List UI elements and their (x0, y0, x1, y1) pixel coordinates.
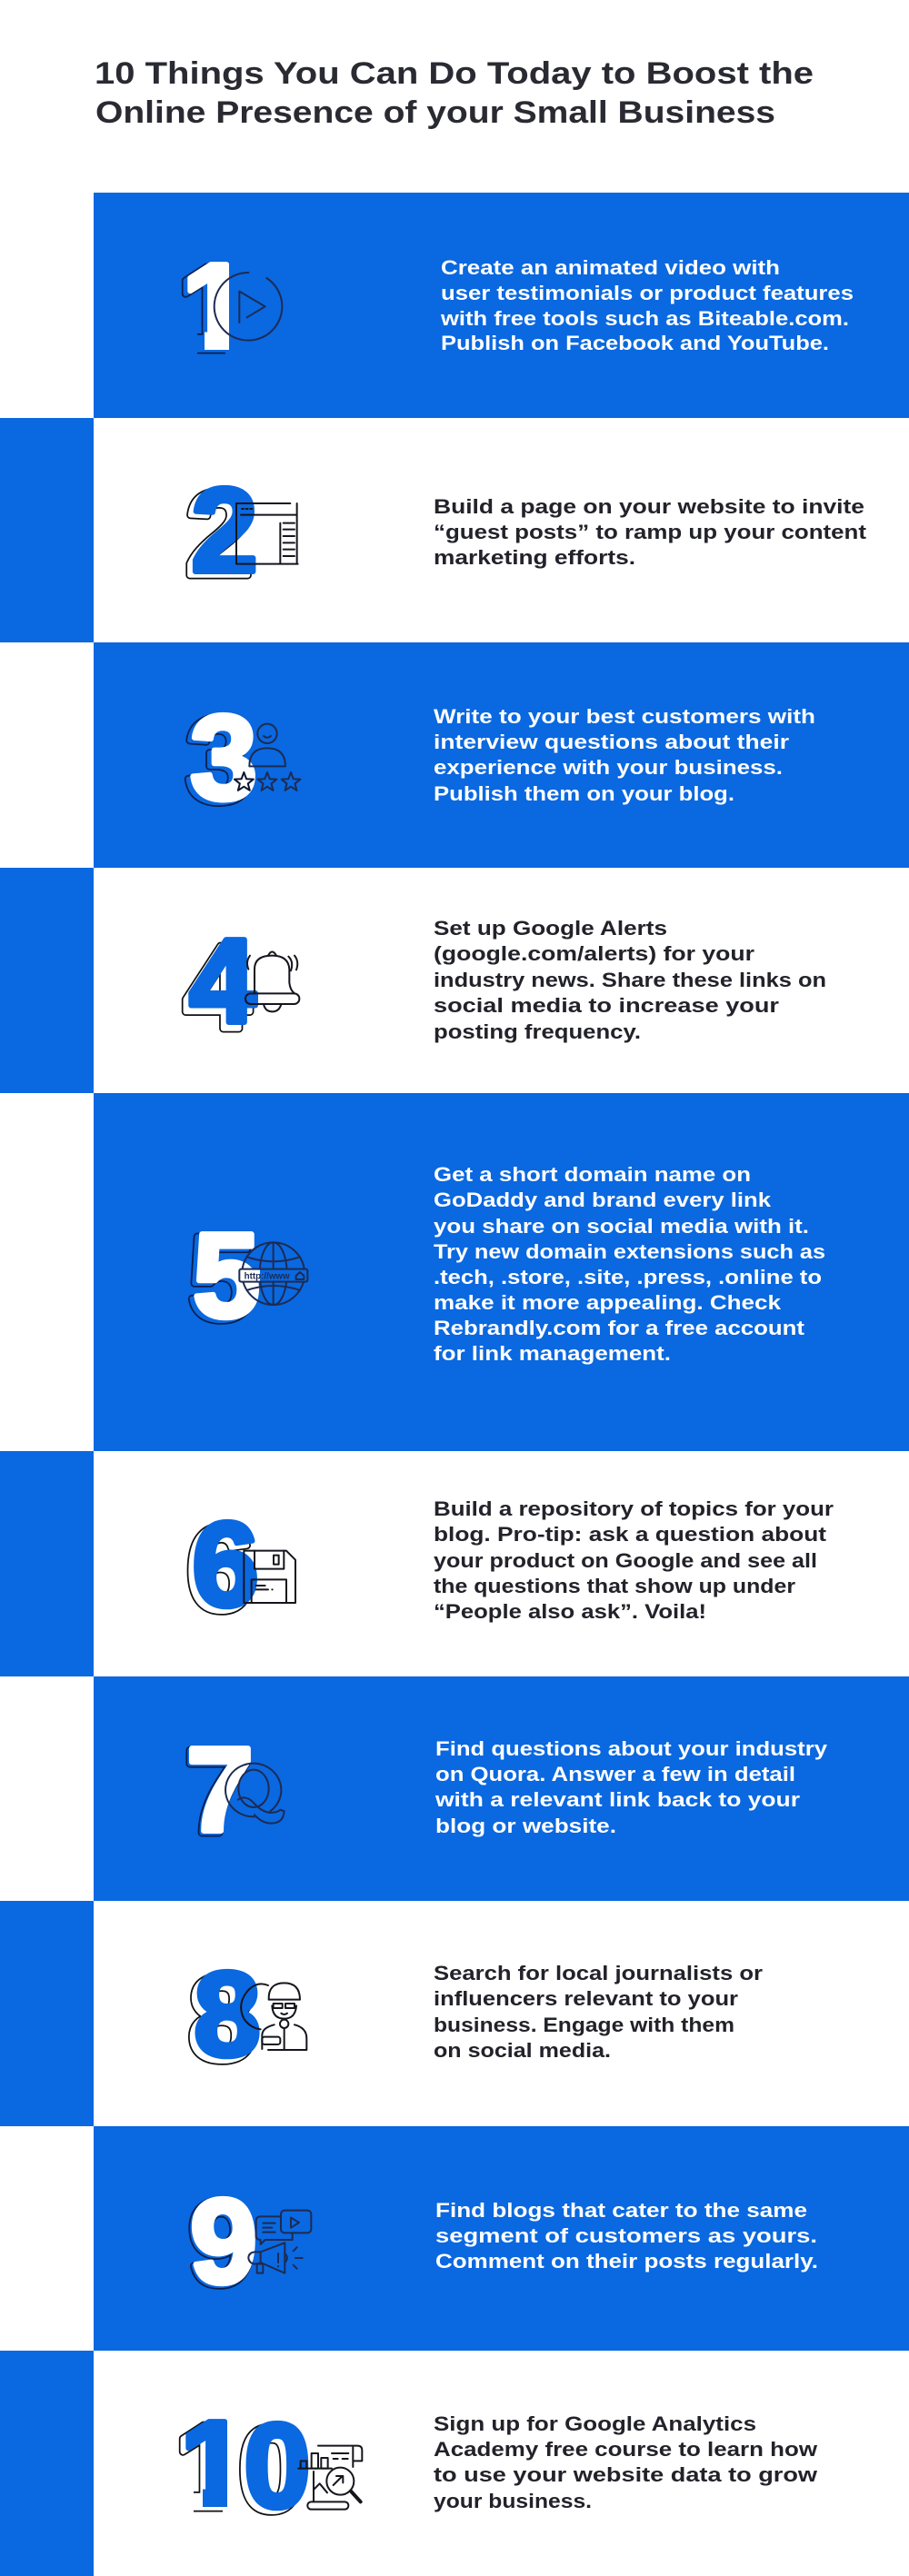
number 8: 8 (188, 1952, 255, 2085)
number 4: 4 (189, 914, 256, 1048)
text block 3: interview questions about their (434, 731, 789, 753)
text block 4: social media to increase your (434, 994, 779, 1017)
text block 4 (434, 917, 826, 1043)
blue side block 10 (0, 2351, 94, 2576)
text block 4: industry news. Share these links on (434, 969, 826, 991)
panel: step 1 (94, 193, 909, 418)
text block 6: the questions that show up under (434, 1575, 795, 1597)
number 10: 0 (238, 2402, 305, 2536)
text block 8: on social media. (434, 2039, 611, 2062)
number 5: 5 (188, 1211, 255, 1345)
text block 6: “People also ask”. Voila! (434, 1600, 706, 1623)
text block 4: posting frequency. (434, 1020, 641, 1043)
title (95, 56, 814, 130)
number 3: 3 (185, 693, 253, 827)
icon: journalist (241, 1983, 306, 2050)
number 8: 8 (188, 1952, 255, 2085)
number 8: 8 (194, 1947, 261, 2081)
number 10: 1 (180, 2396, 247, 2530)
number 3: 3 (185, 693, 253, 827)
number 10: 1 (175, 2400, 242, 2533)
text block 1: Create an animated video with (441, 256, 780, 279)
title: 10 Things You Can Do Today to Boost the (95, 56, 814, 91)
text block 9: Comment on their posts regularly. (435, 2250, 818, 2273)
number 7: 7 (185, 1725, 252, 1858)
text block 6: your product on Google and see all (434, 1549, 817, 1572)
number 10 (178, 2419, 309, 2516)
text block 3 (434, 705, 815, 805)
number 10: 0 (244, 2399, 311, 2532)
blue side block 4 (0, 868, 94, 1093)
text block 7: Find questions about your industry (435, 1737, 828, 1760)
number 3: 3 (190, 691, 257, 824)
panel: step 7 (94, 1676, 909, 1901)
blue band 9 (94, 2126, 909, 2351)
text block 5: for link management. (434, 1342, 671, 1365)
text block 2: “guest posts” to ramp up your content (434, 521, 867, 543)
number 7: 7 (185, 1725, 252, 1858)
text block 4: Set up Google Alerts (434, 917, 667, 940)
number 2: 2 (185, 467, 253, 601)
text block 4: (google.com/alerts) for your (434, 942, 754, 965)
text block 3: experience with your business. (434, 756, 783, 779)
text block 5: Rebrandly.com for a free account (434, 1317, 805, 1339)
text block 7: blog or website. (435, 1815, 616, 1837)
text block 1: user testimonials or product features (441, 282, 854, 304)
number 1: 1 (182, 239, 249, 373)
number 1 (182, 262, 229, 354)
text block 10: to use your website data to grow (434, 2463, 818, 2486)
text block 8 (434, 1962, 763, 2062)
panel: step 8 (0, 1901, 763, 2126)
text block 5: Get a short domain name on (434, 1163, 751, 1186)
panel: step 2 (0, 418, 867, 642)
text block 1: Publish on Facebook and YouTube. (441, 332, 829, 354)
icon: globe with url bar (239, 1242, 307, 1305)
text block 5: you share on social media with it. (434, 1215, 809, 1238)
text block 10 (434, 2412, 818, 2512)
text block 3: Write to your best customers with (434, 705, 815, 728)
panel: step 6 (0, 1451, 834, 1676)
number 10: 0 (238, 2402, 305, 2536)
number 7: 7 (186, 1723, 254, 1856)
text block 8: Search for local journalists or (434, 1962, 763, 1984)
text block 5: GoDaddy and brand every link (434, 1189, 772, 1211)
text block 2: Build a page on your website to invite (434, 495, 864, 518)
icon: globe with url bar: http://www (245, 1271, 290, 1281)
blue side block 6 (0, 1451, 94, 1676)
text block 5: .tech, .store, .site, .press, .online to (434, 1266, 822, 1288)
number 1: 1 (177, 242, 245, 375)
text block 6: Build a repository of topics for your (434, 1497, 834, 1520)
blue side block 8 (0, 1901, 94, 2126)
text block 9: Find blogs that cater to the same (435, 2199, 807, 2222)
blue band 5 (94, 1093, 909, 1451)
panel: step 4 (0, 868, 826, 1093)
text block 2: marketing efforts. (434, 546, 635, 569)
text block 7: on Quora. Answer a few in detail (435, 1763, 795, 1785)
text block 10: Academy free course to learn how (434, 2438, 818, 2461)
text block 5: make it more appealing. Check (434, 1291, 782, 1314)
text block 9: segment of customers as yours. (435, 2224, 817, 2247)
number 4: 4 (184, 920, 251, 1054)
panel: step 9 (94, 2126, 909, 2351)
text block 7: with a relevant link back to your (435, 1788, 800, 1811)
number 10: 1 (175, 2400, 242, 2533)
number 9: 9 (188, 2176, 255, 2310)
blue band 7 (94, 1676, 909, 1901)
icon: Quora Q (225, 1764, 285, 1824)
text block 6 (434, 1497, 834, 1623)
text block 6: blog. Pro-tip: ask a question about (434, 1523, 827, 1546)
text block 2 (434, 495, 867, 569)
icon: analytics report (298, 2446, 362, 2510)
number 6: 6 (186, 1502, 254, 1636)
icon: play button (215, 273, 282, 341)
number 5: 5 (188, 1211, 255, 1345)
text block 1: with free tools such as Biteable.com. (440, 307, 849, 330)
icon: web page (236, 503, 298, 564)
panel: step 3 (94, 642, 909, 868)
blue band 1 (94, 193, 909, 418)
panel: step 10 (0, 2351, 818, 2576)
icon: bell (245, 951, 299, 1011)
number 1: 1 (177, 242, 245, 375)
number 9: 9 (190, 2174, 257, 2308)
number 6: 6 (186, 1502, 254, 1636)
number 2: 2 (185, 467, 253, 601)
text block 5: Try new domain extensions such as (434, 1240, 825, 1263)
text block 5 (434, 1163, 825, 1365)
text block 1 (440, 256, 854, 354)
icon: floppy disk (244, 1551, 295, 1603)
text block 8: business. Engage with them (434, 2014, 734, 2036)
text block 3: Publish them on your blog. (434, 782, 734, 805)
title: Online Presence of your Small Business (95, 95, 775, 130)
icon: customer rating (235, 724, 300, 791)
text block 8: influencers relevant to your (434, 1987, 738, 2010)
text block 10: Sign up for Google Analytics (434, 2412, 756, 2435)
icon: megaphone and video bubble (248, 2211, 311, 2273)
text block 10: your business. (434, 2490, 592, 2512)
text block 7 (435, 1737, 828, 1837)
text block 9 (435, 2199, 818, 2273)
blue band 3 (94, 642, 909, 868)
panel: step 5 (94, 1093, 909, 1451)
number 2: 2 (191, 463, 258, 597)
number 6: 6 (192, 1497, 259, 1631)
number 9: 9 (188, 2176, 255, 2310)
number 5: 5 (193, 1208, 260, 1342)
blue side block 2 (0, 418, 94, 642)
number 4: 4 (184, 920, 251, 1054)
